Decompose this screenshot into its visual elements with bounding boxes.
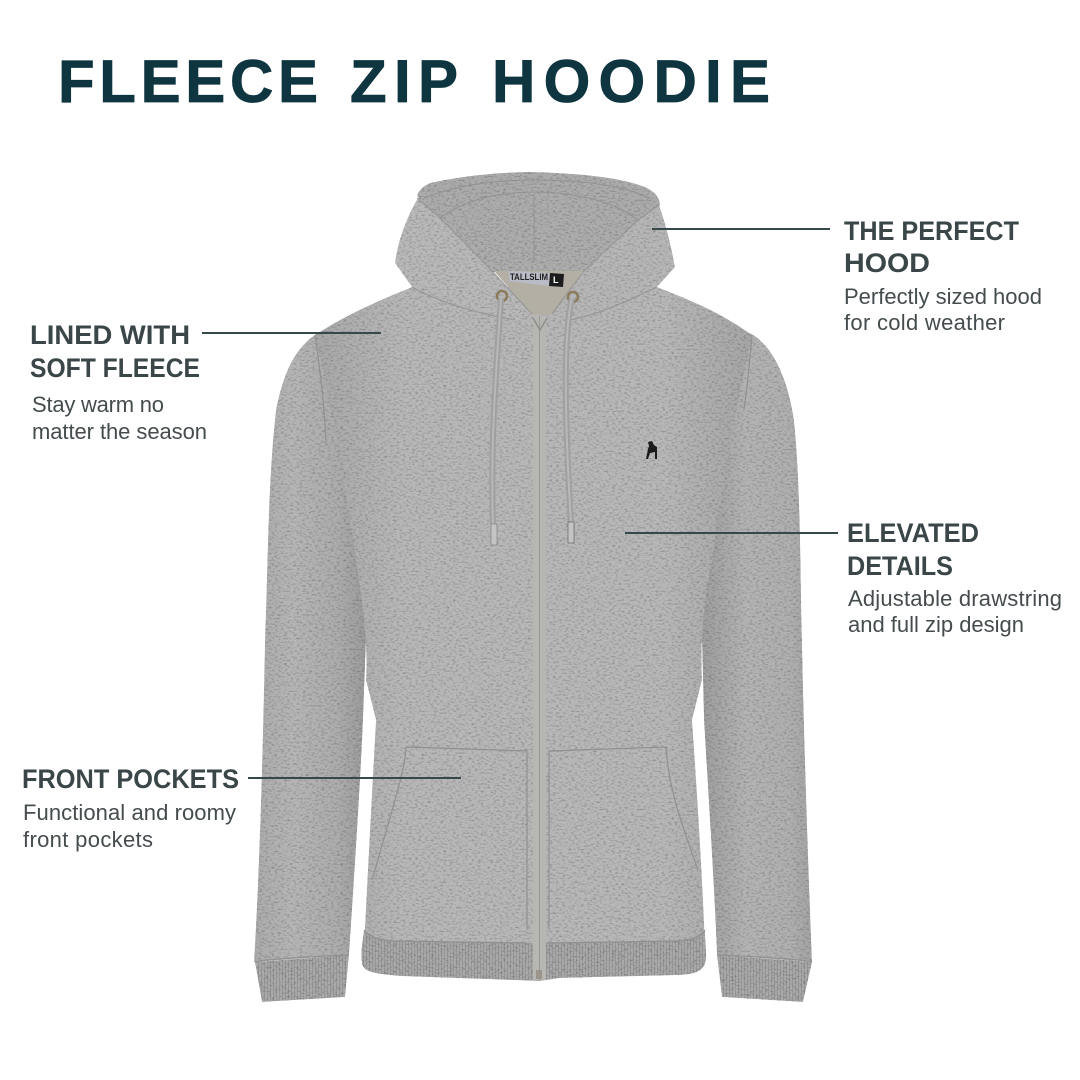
callout: lined with soft fleece: LINED WITH [30, 320, 190, 350]
neck label: TALLSLIM [510, 272, 548, 282]
neck lining [494, 271, 583, 315]
hood shading seams [412, 180, 659, 320]
right cuff [717, 955, 812, 1002]
callout: elevated details: and full zip design [848, 612, 1024, 637]
callout: lined with soft fleece [30, 320, 381, 444]
title: ZIP [350, 48, 458, 115]
hood interior [440, 192, 638, 272]
callout: the perfect hood [652, 216, 1042, 335]
callout: elevated details: DETAILS [847, 551, 953, 581]
left sleeve [254, 333, 366, 962]
callout: lined with soft fleece: SOFT FLEECE [30, 353, 200, 383]
hoodie garment [254, 172, 812, 1002]
dog logo [646, 441, 657, 459]
callout: elevated details: ELEVATED [847, 518, 979, 548]
title [58, 48, 770, 115]
sleeve and pocket seams [255, 335, 812, 962]
neck label [509, 271, 564, 287]
callout: the perfect hood: Perfectly sized hood [844, 284, 1042, 309]
title: FLEECE [58, 48, 318, 115]
hem rib [361, 930, 706, 981]
title: HOODIE [492, 48, 770, 115]
left drawstring [491, 298, 501, 545]
hood left flap [395, 198, 533, 322]
callout: front pockets: Functional and roomy [23, 800, 236, 825]
hood centre seam [533, 194, 535, 262]
right sleeve [702, 333, 812, 962]
eyelets [497, 291, 578, 302]
torso [315, 287, 752, 945]
callout: elevated details [625, 518, 1062, 637]
left cuff [255, 955, 349, 1002]
right drawstring [566, 298, 574, 543]
callout: front pockets: FRONT POCKETS [22, 764, 239, 794]
callout: front pockets: front pockets [23, 827, 153, 852]
callout: the perfect hood: for cold weather [844, 310, 1005, 335]
zipper [533, 316, 547, 980]
textured garment shapes [254, 172, 812, 1002]
callout: lined with soft fleece: Stay warm no [32, 392, 164, 417]
callout: elevated details: Adjustable drawstring [848, 586, 1062, 611]
hood back and rim [417, 172, 660, 240]
callout: lined with soft fleece: matter the season [32, 419, 207, 444]
callout: front pockets [22, 764, 461, 852]
callout: the perfect hood: HOOD [844, 248, 930, 278]
hood right flap [553, 205, 675, 322]
neck label: L [553, 275, 559, 285]
callout: the perfect hood: THE PERFECT [844, 216, 1019, 246]
